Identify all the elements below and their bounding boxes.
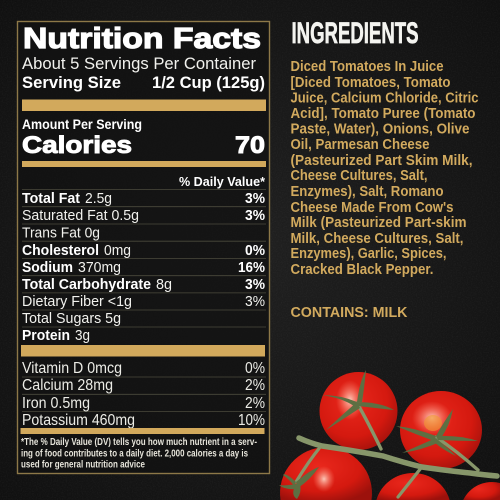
heading: Nutrition Facts: Nutrition Facts bbox=[23, 23, 261, 55]
row: calcium: 2% bbox=[245, 377, 265, 394]
row: total fat: 2.5g bbox=[85, 191, 112, 207]
ingredients list: Enzymes), Salt, Romano bbox=[290, 184, 444, 200]
ingredients list: Cheese Made From Cow's bbox=[290, 200, 454, 216]
serving size: Serving Size bbox=[22, 74, 121, 92]
gold bar bbox=[22, 100, 266, 111]
ingredients list: Cheese Cultures, Salt, bbox=[290, 168, 428, 184]
footnote: used for general nutrition advice bbox=[21, 458, 145, 470]
row: protein: Protein bbox=[22, 328, 70, 344]
gold bar bbox=[21, 345, 265, 356]
row: cholesterol: Cholesterol bbox=[22, 243, 99, 259]
row: dietary fiber: Dietary Fiber <1g bbox=[22, 294, 132, 310]
gold bar bbox=[22, 161, 266, 167]
panel: nutrition facts bbox=[18, 22, 270, 474]
row: dietary fiber bbox=[22, 294, 265, 310]
row: iron: Iron 0.5mg bbox=[22, 395, 90, 412]
row: calcium bbox=[22, 377, 265, 394]
ingredients list: Milk (Pasteurized Part-skim bbox=[290, 215, 466, 231]
footnote: ing of food contributes to a daily diet. 2,000 calories a day is bbox=[21, 448, 248, 460]
row: total fat bbox=[22, 191, 265, 207]
ingredients list: Paste, Water), Onions, Olive bbox=[290, 122, 470, 138]
ingredients list: (Pasteurized Part Skim Milk, bbox=[290, 153, 472, 169]
ingredients list: Milk, Cheese Cultures, Salt, bbox=[290, 231, 464, 247]
row: saturated fat bbox=[22, 208, 265, 224]
servings per container: About 5 Servings Per Container bbox=[22, 54, 256, 73]
ingredients list: Oil, Parmesan Cheese bbox=[290, 137, 430, 153]
row: total carbohydrate: Total Carbohydrate bbox=[22, 277, 151, 293]
row: vitamin d bbox=[22, 360, 265, 377]
ingredients list: Enzymes), Garlic, Spices, bbox=[290, 246, 446, 262]
ingredients list bbox=[290, 59, 478, 278]
row: vitamin d: 0% bbox=[245, 360, 265, 377]
row: iron: 2% bbox=[245, 395, 265, 412]
row: dietary fiber: 3% bbox=[245, 294, 265, 310]
row: cholesterol: 0mg bbox=[104, 243, 131, 259]
row: total carbohydrate bbox=[22, 277, 265, 293]
row: total fat: 3% bbox=[245, 191, 265, 207]
row: saturated fat: Saturated Fat 0.5g bbox=[22, 208, 139, 224]
row: potassium: 10% bbox=[238, 412, 265, 429]
footnote: *The % Daily Value (DV) tells you how much nutrient in a serv- bbox=[21, 436, 257, 448]
ingredients list: Acid], Tomato Puree (Tomato bbox=[290, 106, 476, 122]
row: calcium: Calcium 28mg bbox=[22, 377, 113, 394]
row: potassium bbox=[22, 412, 265, 429]
row: iron bbox=[22, 395, 265, 412]
serving size bbox=[22, 74, 265, 92]
row: vitamin d: Vitamin D 0mcg bbox=[22, 360, 122, 377]
row: potassium: Potassium 460mg bbox=[22, 412, 135, 429]
serving size: 1/2 Cup (125g) bbox=[152, 74, 265, 92]
row: cholesterol: 0% bbox=[245, 243, 265, 259]
calories: Calories bbox=[22, 132, 132, 159]
row: total fat: Total Fat bbox=[22, 191, 80, 207]
row: sodium: 370mg bbox=[78, 260, 121, 276]
row: sodium: Sodium bbox=[22, 260, 73, 276]
row: saturated fat: 3% bbox=[245, 208, 265, 224]
row: trans fat: Trans Fat 0g bbox=[22, 226, 100, 242]
row: total carbohydrate: 3% bbox=[245, 277, 265, 293]
row: cholesterol bbox=[22, 243, 265, 259]
heading: ingredients: INGREDIENTS bbox=[292, 17, 418, 50]
footnote bbox=[21, 436, 257, 470]
illustration: tomatoes on the vine bbox=[279, 370, 500, 500]
ingredients list: Cracked Black Pepper. bbox=[290, 262, 434, 278]
calories bbox=[22, 132, 265, 159]
row: total sugars: Total Sugars 5g bbox=[22, 311, 121, 327]
gold bar bbox=[20, 428, 264, 434]
daily value header: % Daily Value* bbox=[179, 174, 266, 189]
row: total carbohydrate: 8g bbox=[156, 277, 172, 293]
ingredients list: Juice, Calcium Chloride, Citric bbox=[290, 90, 478, 106]
row: protein: 3g bbox=[75, 328, 90, 344]
allergen note: CONTAINS: MILK bbox=[290, 305, 408, 321]
ingredients list: [Diced Tomatoes, Tomato bbox=[290, 75, 451, 91]
calories: 70 bbox=[235, 132, 265, 159]
ingredients list: Diced Tomatoes In Juice bbox=[290, 59, 444, 75]
amount per serving: Amount Per Serving bbox=[22, 117, 142, 132]
row: sodium: 16% bbox=[238, 260, 265, 276]
row: sodium bbox=[22, 260, 265, 276]
